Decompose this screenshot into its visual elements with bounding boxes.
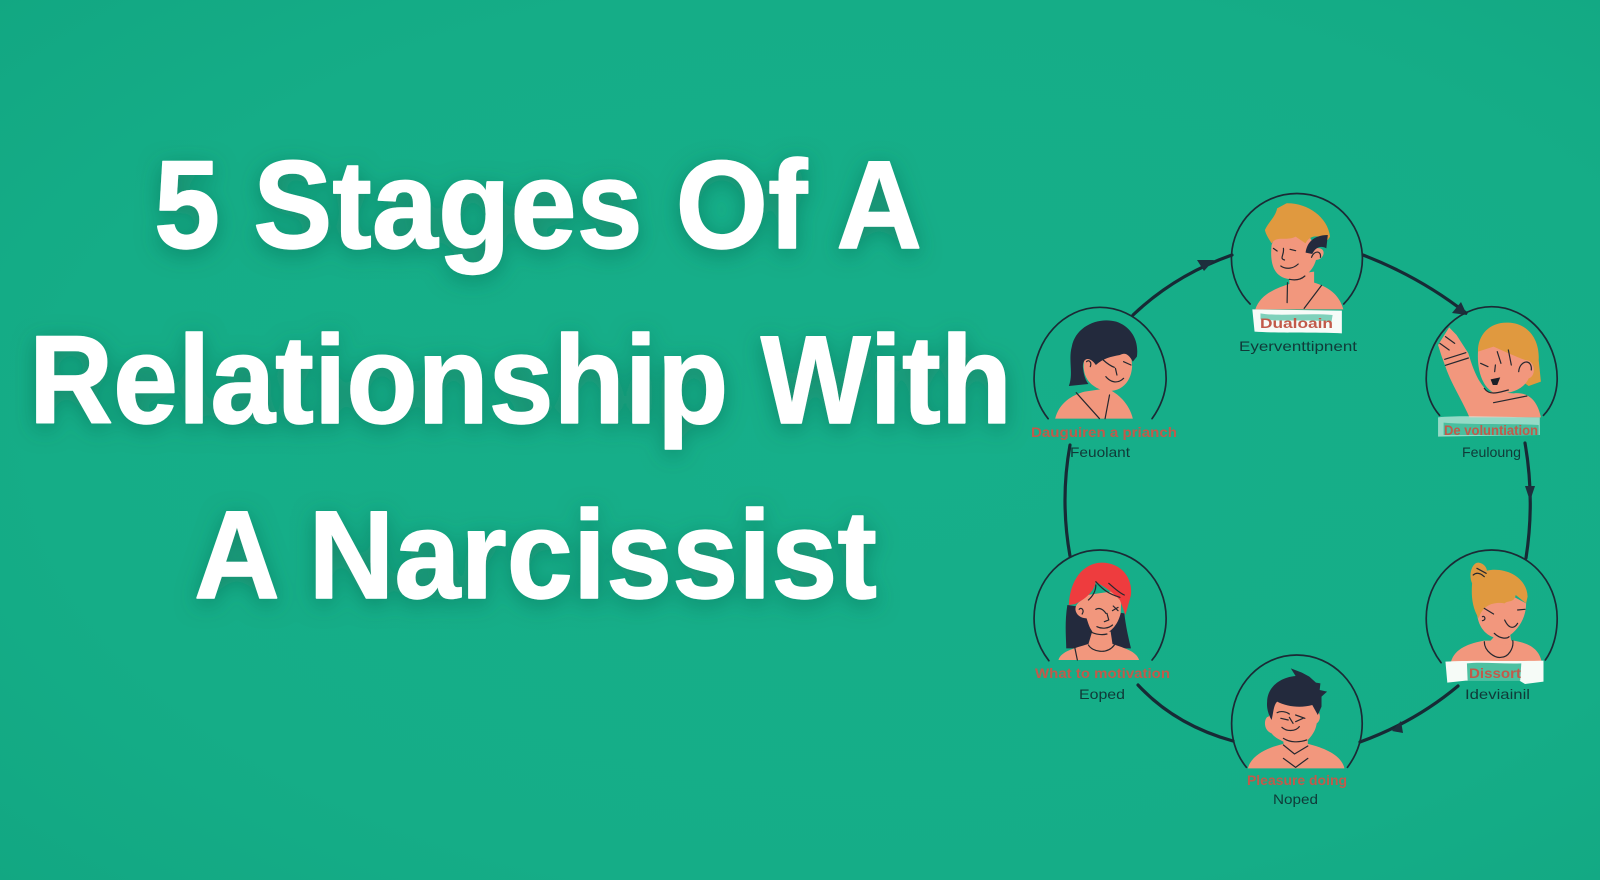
title <box>29 136 1012 625</box>
arrow: lower right stage to bottom stage <box>1360 686 1458 742</box>
stage label: What to motivation <box>1035 665 1170 681</box>
stage label: Dualoain <box>1260 315 1333 331</box>
stage: lower left person <box>1034 550 1170 702</box>
stage sublabel: Feuloung <box>1462 444 1521 460</box>
stage sublabel: Ideviainil <box>1465 686 1530 702</box>
stage label: Pleasure doing <box>1247 772 1347 788</box>
title: Relationship With <box>29 311 1012 450</box>
stage label: De voluntiation <box>1444 422 1538 438</box>
stage sublabel: Eyerventtipnent <box>1239 338 1357 354</box>
stage: top person <box>1231 194 1362 354</box>
stage: bottom person <box>1232 655 1362 807</box>
stage sublabel: Feuolant <box>1070 444 1130 460</box>
stage label: Dissort <box>1469 665 1521 681</box>
arrow: lower left stage to bottom stage <box>1138 685 1233 741</box>
cycle diagram <box>1031 194 1557 807</box>
stage label: Dauguiren a prianch <box>1031 424 1177 440</box>
stage: left person <box>1031 307 1177 460</box>
arrow: left stage to top stage <box>1133 255 1232 315</box>
title: 5 Stages Of A <box>154 136 922 275</box>
arrow: right stage to lower right stage <box>1525 443 1535 558</box>
stage sublabel: Eoped <box>1079 686 1125 702</box>
stage: lower right person <box>1426 550 1557 702</box>
stage sublabel: Noped <box>1273 791 1318 807</box>
arrow: lower left stage to left stage <box>1065 445 1070 556</box>
stage: right person <box>1426 307 1557 460</box>
arrow: top stage to right stage <box>1363 255 1467 315</box>
title: A Narcissist <box>194 486 877 625</box>
